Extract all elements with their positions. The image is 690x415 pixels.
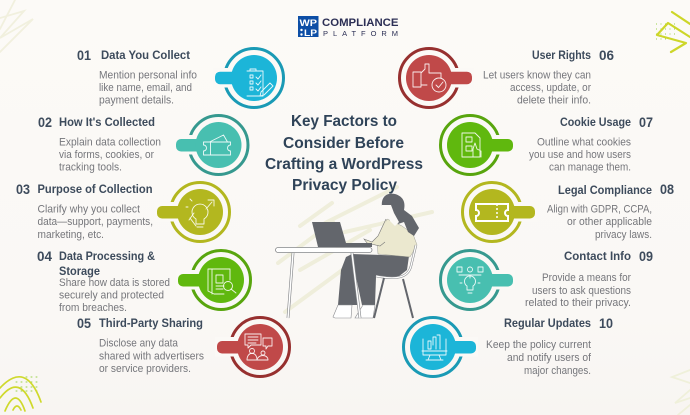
icon: checklist badge: [213, 48, 284, 108]
item 05: third-party sharing: [77, 315, 290, 376]
item 07: cookie usage: [440, 114, 653, 174]
item 02: how it's collected: Explain data collection: [59, 136, 161, 148]
item 09: contact info: [440, 248, 653, 310]
item 08: legal compliance: privacy laws.: [595, 229, 652, 241]
item 04: data processing and storage: Share how data is stored: [59, 277, 170, 289]
item 05: third-party sharing: shared with advertisers: [99, 350, 204, 362]
item 02: how it's collected: How It's Collected: [59, 115, 155, 129]
icon: flow chart with bulb badge: [440, 250, 515, 310]
title: [265, 113, 423, 194]
item 09: contact info: 09: [639, 248, 653, 264]
item 01: data you collect: [77, 47, 284, 108]
icon: document and magnifier badge: [176, 250, 250, 310]
item 07: cookie usage: 07: [639, 114, 653, 130]
item 09: contact info: Provide a means for: [542, 272, 631, 284]
title: Crafting a WordPress: [265, 156, 423, 173]
item 07: cookie usage: you use and how users: [529, 149, 631, 161]
logo: [298, 16, 398, 38]
item 03: purpose of collection: 03: [16, 181, 30, 197]
decoration: bottom-left fingerprint arcs and dots: [0, 377, 41, 411]
item 10: regular updates: 10: [599, 315, 613, 331]
item 10: regular updates: Keep the policy current: [486, 339, 591, 351]
title: Consider Before: [283, 135, 404, 152]
item 08: legal compliance: Legal Compliance: [558, 183, 652, 197]
item 08: legal compliance: or other applicable: [567, 216, 652, 228]
decoration: top-left scribble: [0, 0, 33, 52]
item 03: purpose of collection: Purpose of Collection: [38, 182, 152, 196]
icon: ticket badge: [174, 116, 248, 174]
item 05: third-party sharing: or service providers.: [99, 363, 191, 375]
item 07: cookie usage: can manage them.: [549, 162, 631, 174]
item 01: data you collect: like name, email, and: [99, 82, 192, 94]
decoration: bottom-right scribble: [672, 370, 690, 415]
item 04: data processing and storage: 04: [37, 248, 52, 264]
item 01: data you collect: payment details.: [99, 94, 174, 106]
item 07: cookie usage: Cookie Usage: [560, 115, 631, 129]
item 01: data you collect: 01: [77, 47, 91, 63]
item 06: user rights: 06: [599, 47, 614, 63]
item 06: user rights: delete their info.: [517, 94, 591, 106]
item 06: user rights: [400, 47, 614, 108]
item 07: cookie usage: Outline what cookies: [537, 136, 631, 148]
item 02: how it's collected: [38, 114, 248, 174]
item 08: legal compliance: Align with GDPR, CCPA,: [547, 204, 652, 216]
item 05: third-party sharing: Third-Party Sharing: [99, 316, 203, 330]
item 10: regular updates: and notify users of: [507, 352, 592, 364]
logo: LP: [304, 28, 317, 38]
title: Privacy Policy: [292, 177, 397, 194]
item 06: user rights: User Rights: [532, 48, 591, 62]
item 02: how it's collected: 02: [38, 114, 52, 130]
logo: COMPLIANCE: [322, 17, 398, 29]
item 09: contact info: Contact Info: [564, 249, 631, 263]
item 04: data processing and storage: [37, 248, 250, 314]
item 01: data you collect: Data You Collect: [101, 48, 190, 62]
item 10: regular updates: [404, 315, 613, 377]
item 03: purpose of collection: data—support, payments,: [38, 216, 153, 228]
item 03: purpose of collection: Clarify why you collect: [38, 204, 140, 216]
item 09: contact info: users to ask questions: [532, 285, 631, 297]
item 05: third-party sharing: Disclose any data: [99, 338, 179, 350]
item 08: legal compliance: [462, 181, 674, 242]
item 02: how it's collected: tracking tools.: [59, 162, 122, 174]
logo: WP: [300, 18, 317, 28]
item 05: third-party sharing: 05: [77, 315, 91, 331]
item 06: user rights: access, update, or: [510, 82, 591, 94]
icon: people and chat badge: [215, 318, 290, 376]
icon: thumbs up badge: [400, 48, 474, 108]
icon: light bulb badge: [155, 182, 230, 242]
item 03: purpose of collection: marketing, etc.: [38, 229, 104, 241]
title: Key Factors to: [291, 113, 397, 130]
item 04: data processing and storage: Data Processing &: [59, 249, 155, 263]
logo: PLATFORM: [323, 29, 398, 38]
icon: form and pointer badge: [440, 116, 515, 174]
item 10: regular updates: major changes.: [524, 365, 591, 377]
icon: ticket badge: [462, 182, 537, 242]
illustration: woman working at desk: [276, 187, 432, 318]
item 03: purpose of collection: [16, 181, 230, 242]
icon: monitor with chart badge: [404, 318, 478, 376]
item 02: how it's collected: via forms, cookies, or: [59, 149, 154, 161]
decoration: top-right scribble and dots: [656, 12, 690, 52]
item 09: contact info: related to their privacy.: [525, 297, 631, 309]
item 04: data processing and storage: Storage: [59, 264, 100, 278]
item 01: data you collect: Mention personal info: [99, 70, 197, 82]
item 04: data processing and storage: from breaches.: [59, 302, 127, 314]
item 06: user rights: Let users know they can: [483, 70, 591, 82]
item 04: data processing and storage: securely and protected: [59, 290, 164, 302]
item 08: legal compliance: 08: [660, 181, 674, 197]
item 10: regular updates: Regular Updates: [504, 316, 591, 330]
